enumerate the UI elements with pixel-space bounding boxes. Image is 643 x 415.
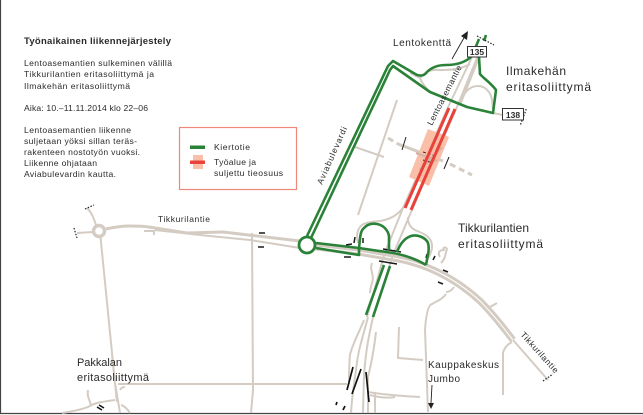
description text: Lentoasemantien liikenne	[24, 125, 131, 135]
label: Ilmakehän interchange: Ilmakehän	[506, 64, 566, 78]
Aviabulevardi detour	[307, 39, 479, 236]
road ends	[74, 36, 553, 381]
Lentoasemantie	[367, 57, 478, 317]
label: Tikkurilantien interchange	[458, 221, 543, 251]
side roads	[355, 100, 397, 215]
Tikkurilantie east	[300, 245, 513, 340]
label: Lentokenttä: Lentokenttä	[393, 38, 451, 49]
road network	[62, 57, 548, 413]
legend: detour: Kiertotie	[214, 142, 250, 152]
legend: work area	[190, 155, 283, 178]
intro text: Lentoasemantien sulkeminen välillä	[24, 58, 172, 68]
arrow: airport	[452, 31, 468, 59]
Ilmakehä interchange	[410, 57, 503, 115]
label: Kauppakeskus Jumbo	[428, 360, 499, 385]
roundabout	[299, 237, 315, 253]
south roads	[300, 327, 512, 398]
label: Aviabulevardi: Aviabulevardi	[315, 125, 349, 186]
legend	[180, 128, 296, 190]
Tikkurilantie interchange ramps	[357, 208, 447, 293]
legend: work area: Työalue ja	[214, 157, 256, 167]
closed section lines	[405, 108, 455, 210]
description text: rakenteen nostotyön vuoksi.	[24, 147, 140, 157]
title: Työnaikainen liikennejärjestely	[24, 36, 172, 47]
label: Kauppakeskus Jumbo: Kauppakeskus	[428, 360, 499, 371]
bridge markers	[97, 233, 448, 410]
cross road	[388, 138, 472, 175]
description text: suljetaan yöksi sillan teräs-	[24, 136, 137, 146]
label: Tikkurilantien interchange: Tikkurilantien	[458, 221, 529, 235]
road sign 135: 135	[470, 47, 484, 57]
label: Pakkalan interchange: Pakkalan	[77, 357, 122, 369]
Tikkurilantie detour	[316, 224, 389, 250]
intro text: Tikkurilantien eritasoliittymä ja	[24, 69, 154, 79]
label: Pakkalan interchange	[77, 357, 150, 384]
description text	[24, 125, 140, 179]
label: Kauppakeskus Jumbo: Jumbo	[428, 374, 460, 385]
legend: work area: suljettu tieosuus	[214, 168, 283, 178]
label: Tikkurilantie east: Tikkurilantie	[519, 330, 561, 375]
label: Lentoasemantie: Lentoasemantie	[425, 63, 464, 127]
detour route	[299, 35, 496, 317]
Tikkurilantie west	[62, 208, 300, 413]
intro text	[24, 58, 172, 91]
description text: Liikenne ohjataan	[24, 158, 97, 168]
intro text: Ilmakehän eritasoliittymä	[24, 81, 130, 91]
description text: Aviabulevardin kautta.	[24, 169, 116, 179]
arrow: Jumbo	[428, 385, 434, 409]
label: Tikkurilantie west: Tikkurilantie	[158, 214, 210, 224]
date text: Aika: 10.–11.11.2014 klo 22–06	[24, 103, 148, 113]
road sign 138	[502, 108, 524, 120]
label: Ilmakehän interchange	[506, 64, 591, 94]
label: Pakkalan interchange: eritasoliittymä	[77, 372, 150, 384]
label: Ilmakehän interchange: eritasoliittymä	[506, 80, 591, 94]
work area	[402, 108, 455, 210]
road sign 138: 138	[506, 110, 520, 120]
southern detour	[366, 265, 390, 317]
label: Tikkurilantien interchange: eritasoliittymä	[458, 237, 543, 251]
